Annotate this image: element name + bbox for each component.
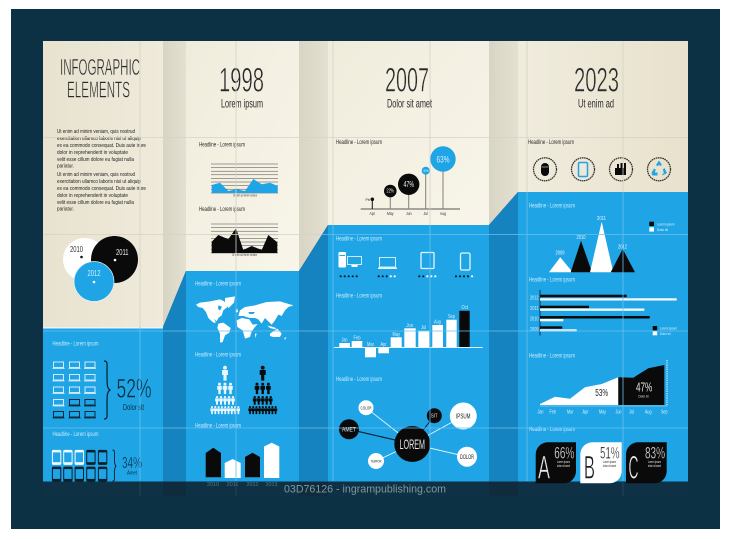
card A: Lorem ipsum — [557, 460, 570, 464]
device icons — [336, 236, 473, 277]
area chart: blue: Headline - Lorem ipsum — [199, 142, 245, 148]
phones stat 34% — [52, 431, 142, 481]
icon: mouse — [534, 158, 556, 181]
card B — [580, 442, 622, 485]
house bar chart: 2011 — [226, 482, 238, 488]
card C: 83% — [645, 444, 665, 462]
house bar chart — [195, 423, 279, 488]
text block: intro paragraphs: exercitation ullamco laboris nisi ut aliquip — [57, 179, 141, 185]
house bar chart: 2013 — [266, 482, 278, 488]
horizontal bar chart — [529, 277, 677, 336]
text block: intro paragraphs: ex ea commodo consequat. Duis aute irure — [57, 143, 146, 149]
legend: Dolor sit — [660, 332, 671, 336]
monthly bar chart: Jun — [406, 323, 413, 329]
monthly bar chart: Apr — [380, 342, 387, 348]
legend — [653, 326, 677, 336]
area chart: blue — [199, 142, 278, 198]
triangle chart — [529, 203, 674, 272]
legend — [649, 222, 674, 232]
monthly bar chart: Aug — [434, 320, 441, 326]
split area chart: Aug — [645, 410, 652, 416]
lollipop chart: 22% — [386, 189, 394, 195]
text block: intro paragraphs — [57, 129, 146, 212]
monthly bar chart: Jan — [342, 338, 348, 344]
area chart: blue: Ut enim ad minim veniam — [233, 194, 257, 198]
text block: intro paragraphs: dolor in reprehenderit in voluptate — [57, 150, 128, 156]
split area chart: Jul — [629, 410, 634, 416]
icon: factory — [610, 158, 632, 181]
split area chart: Feb — [550, 410, 556, 416]
card A: 66% — [554, 444, 574, 462]
text block: intro paragraphs: exercitation ullamco laboris nisi ut aliquip — [57, 136, 141, 142]
heading: 2007: 2007 — [385, 62, 429, 100]
icon row — [528, 139, 670, 181]
phones stat 34%: Headline - Lorem ipsum — [52, 431, 98, 438]
monthly bar chart: Oct — [462, 305, 468, 311]
year circles: 2010 — [70, 245, 83, 254]
letter cards: Headline - Lorem ipsum — [529, 426, 575, 433]
split area chart: Headline - Lorem ipsum — [529, 353, 575, 360]
lollipop chart: 5% — [424, 169, 429, 173]
monthly bar chart: May — [392, 332, 400, 338]
text block: intro paragraphs: dolor in reprehenderit in voluptate — [57, 193, 128, 199]
icon: tablet — [421, 252, 434, 268]
monthly bar chart: Mar — [367, 342, 374, 348]
text block: intro paragraphs: velit esse cillum dolore eu fugiat nulla — [57, 200, 135, 206]
card A — [536, 442, 576, 485]
triangle chart: 2009 — [556, 250, 564, 256]
white pyramid — [210, 366, 240, 414]
split area chart: Apr — [582, 410, 589, 416]
device icons: Headline - Lorem ipsum — [336, 236, 382, 243]
bottom watermark band — [43, 482, 688, 496]
house bar chart: 2010 — [207, 482, 219, 488]
triangle chart: 2011 — [597, 216, 606, 222]
card C: Lorem ipsum — [648, 460, 661, 464]
letter cards — [529, 426, 667, 485]
card C: dolor sit amet — [648, 464, 661, 468]
horizontal bar chart: 2009 — [530, 327, 539, 333]
lollipop chart: Aug — [440, 211, 446, 216]
laptops stat 52%: Headline - Lorem ipsum — [52, 341, 98, 348]
world map — [195, 281, 293, 343]
heading: 1998 — [219, 62, 264, 111]
black pyramid — [248, 366, 277, 414]
network diagram: LOREM — [400, 436, 425, 452]
title — [60, 54, 140, 102]
icon: desktop — [338, 252, 362, 268]
lollipop chart: May — [387, 211, 394, 216]
icon row: Headline - Lorem ipsum — [528, 139, 574, 146]
network diagram: SIT — [431, 414, 438, 420]
lollipop chart: Pb — [366, 198, 370, 202]
phones stat 34%: 34% — [122, 455, 142, 472]
icon: phone — [572, 158, 594, 181]
heading: 1998: 1998 — [219, 62, 264, 100]
network diagram: IPSUM — [456, 414, 471, 420]
horizontal bar chart: Headline - Lorem ipsum — [529, 277, 575, 284]
area chart: black: Ut enim ad minim veniam — [232, 253, 257, 257]
card B: Lorem ipsum — [603, 460, 616, 464]
network diagram: Headline - Lorem ipsum — [336, 376, 382, 383]
lollipop chart: Headline - Lorem ipsum — [336, 139, 382, 146]
title: ELEMENTS — [67, 76, 130, 102]
rating dots — [340, 275, 473, 277]
split area chart: Mar — [567, 410, 574, 416]
network diagram: DOLOR — [460, 455, 474, 461]
area chart: black: Headline - Lorem ipsum — [199, 206, 245, 213]
network diagram — [336, 376, 477, 469]
people pyramids — [195, 352, 277, 414]
split area chart — [529, 353, 668, 416]
laptops stat 52% — [52, 341, 152, 419]
panel: cream background — [43, 41, 688, 327]
legend: Lorem ipsum — [660, 326, 677, 330]
card C — [626, 442, 667, 485]
split area chart: 47% — [636, 380, 653, 395]
year circles: 2012 — [88, 269, 101, 278]
horizontal bar chart: 2010 — [530, 316, 539, 322]
monthly bar chart: Feb — [354, 336, 360, 342]
legend: Lorem ipsum — [657, 222, 674, 226]
text block: intro paragraphs: velit esse cillum dolore eu fugiat nulla — [57, 157, 135, 163]
heading: 2023 — [574, 62, 619, 111]
split area chart: Jan — [538, 410, 544, 416]
heading: 2023: 2023 — [574, 62, 619, 100]
split area chart: Jun — [616, 410, 622, 416]
icon: smartphone — [460, 253, 470, 270]
network diagram: AMET — [342, 428, 356, 434]
card A: dolor sit amet — [557, 464, 570, 468]
icon: laptop — [378, 258, 397, 269]
heading: 2007 — [385, 62, 432, 111]
split area chart: 53% — [595, 388, 608, 399]
text block: intro paragraphs: Ut enim ad minim veniam, quis nostrud — [57, 172, 135, 178]
legend: Dolor sit — [657, 228, 669, 232]
triangle chart: Headline - Lorem ipsum — [529, 203, 575, 210]
laptops stat 52%: 52% — [116, 374, 152, 404]
horizontal bar chart: 2012 — [530, 296, 539, 302]
year circles — [63, 236, 138, 302]
network diagram: TEMPOR — [370, 458, 382, 464]
heading: 1998: Lorem ipsum — [221, 97, 263, 111]
horizontal bar chart: 2011 — [530, 306, 539, 312]
card B: dolor sit amet — [603, 464, 616, 468]
house bar chart: 2012 — [246, 482, 258, 488]
card B: B — [584, 449, 595, 485]
lollipop chart: 63% — [436, 154, 450, 166]
world map: Headline - Lorem ipsum — [195, 281, 241, 288]
monthly bar chart: Headline - Lorem ipsum — [336, 293, 382, 300]
area chart: black — [199, 206, 278, 257]
triangle chart: 2010 — [576, 235, 586, 241]
network diagram: COLOR — [360, 406, 372, 410]
monthly bar chart: Sep — [448, 314, 455, 320]
heading: 2007: Dolor sit amet — [387, 97, 432, 111]
text block: intro paragraphs: pariatur. — [57, 206, 74, 212]
lollipop chart — [336, 139, 460, 216]
text block: intro paragraphs: ex ea commodo consequat. Duis aute irure — [57, 186, 146, 192]
people pyramids: Headline - Lorem ipsum — [195, 352, 241, 359]
lollipop chart: Jul — [424, 211, 428, 216]
text block: intro paragraphs: pariatur. — [57, 164, 74, 170]
heading: 2023: Ut enim ad — [578, 97, 614, 111]
icon: recycle — [648, 158, 670, 181]
text block: intro paragraphs: Ut enim ad minim veniam, quis nostrud — [57, 129, 135, 135]
laptops stat 52%: Dolor sit — [123, 403, 145, 412]
lollipop chart: 47% — [404, 180, 414, 189]
card C: C — [628, 449, 638, 485]
title: INFOGRAPHIC — [60, 54, 140, 80]
phones stat 34%: Amet — [127, 470, 138, 476]
panel: blue background — [43, 192, 688, 482]
card B: 51% — [600, 444, 620, 462]
split area chart: May — [599, 410, 606, 416]
monthly bar chart — [334, 293, 483, 357]
card A: A — [538, 449, 550, 485]
split area chart: Sep — [661, 410, 668, 416]
house bar chart: Headline - Lorem ipsum — [195, 423, 241, 430]
split area chart: Dolor sit — [638, 394, 649, 398]
lollipop chart: Apr — [370, 211, 375, 216]
lollipop chart: Jun — [406, 211, 412, 216]
watermark text: 03D76126 - ingrampublishing.com — [284, 484, 446, 496]
monthly bar chart: Jul — [421, 325, 426, 331]
triangle chart: 2012 — [618, 244, 627, 250]
year circles: 2011 — [116, 248, 129, 257]
